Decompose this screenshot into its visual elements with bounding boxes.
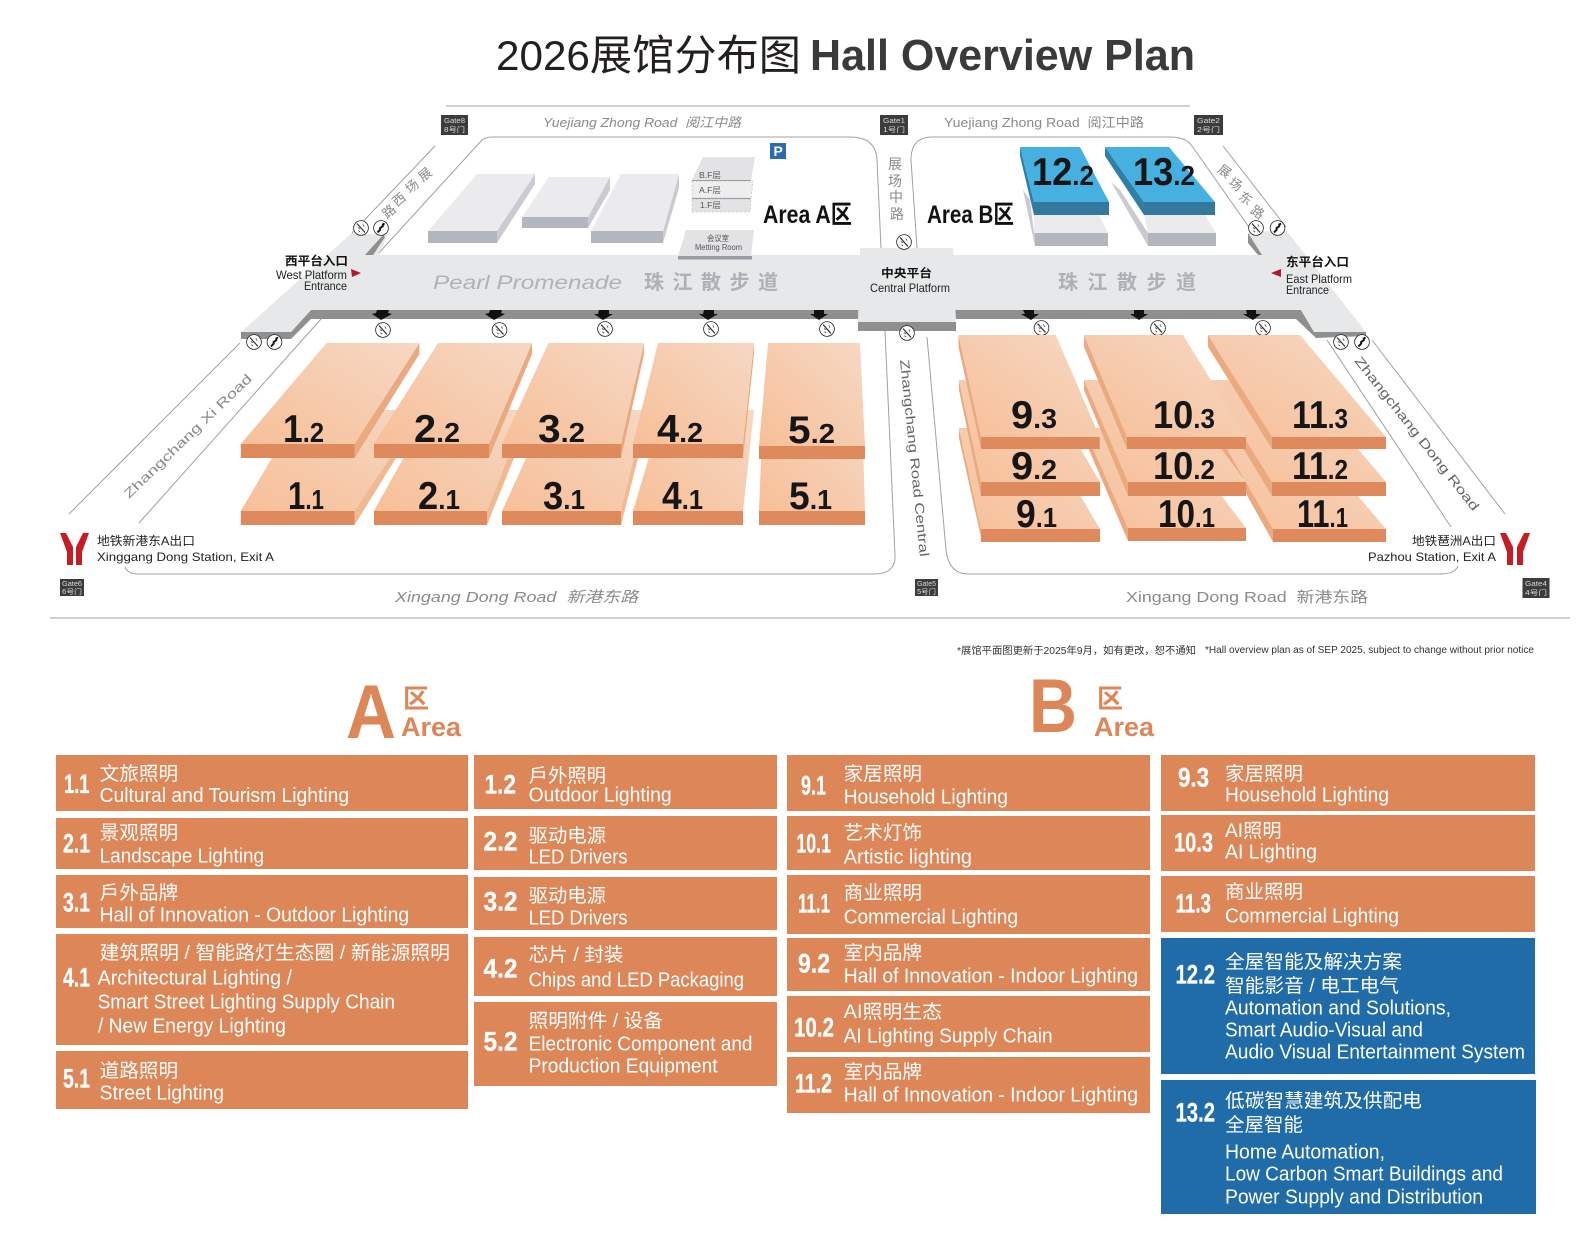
panel: 11.1: Commercial Lighting	[844, 906, 1018, 928]
panel: 10.1: Artistic lighting	[844, 846, 972, 868]
road label: east exhibition road: 场	[1226, 174, 1245, 194]
panel: 11.3: 商业照明	[1225, 881, 1303, 903]
panel: 5.2: 5.2	[484, 1026, 518, 1056]
east platform entrance label: Entrance	[1286, 283, 1329, 297]
panel: 2.2: LED Drivers	[529, 846, 628, 868]
panel: 11.2: 11.2	[795, 1068, 832, 1098]
panel: 11.1	[787, 875, 1150, 934]
road label: Zhangchang Road Central: Zhangchang Road Central	[897, 359, 932, 557]
panel: 1.1: 1.1	[64, 769, 90, 799]
floor stack B.F A.F 1.F: 1.F层	[700, 201, 721, 210]
hall 11.2 label: 11.2	[1292, 445, 1348, 488]
road outlines	[50, 106, 1570, 618]
panel: 9.1	[787, 755, 1150, 811]
central platform label: 中央平台	[881, 266, 932, 280]
hall 11.1 label: 11.1	[1297, 493, 1348, 536]
gates: 2号门	[1197, 125, 1220, 134]
gates: Gate5	[917, 581, 936, 588]
hall 9.3: 9.3	[1011, 394, 1057, 437]
panel: 13.2: Home Automation,	[1225, 1142, 1385, 1164]
promenade label east: 珠江散步道	[1058, 271, 1196, 294]
panel: 11.1: 11.1	[798, 888, 830, 918]
heading: Area B: 区	[1097, 684, 1123, 714]
hall 4.2	[633, 343, 754, 458]
label: Area A: Area A区	[763, 201, 852, 229]
panel: 10.3	[1161, 815, 1535, 871]
panel: 2.2: 驱动电源	[529, 825, 606, 847]
panel: 12.2: 智能影音 / 电工电气	[1225, 975, 1399, 997]
panel: 9.3: Household Lighting	[1225, 784, 1389, 806]
panel: 1.1: Cultural and Tourism Lighting	[100, 785, 349, 807]
hall 2.1 label: 2.1	[418, 475, 460, 518]
Area A grey buildings	[428, 174, 679, 243]
road label: west exhibition road	[379, 165, 435, 221]
panel: 11.3: Commercial Lighting	[1225, 906, 1399, 928]
metro: Pazhou Station	[1368, 533, 1530, 565]
road label: Xingang Dong Road west: Xingang Dong Road 新港东路	[394, 589, 640, 606]
Area B middle halls	[959, 380, 1386, 496]
panel: 5.2	[474, 1002, 777, 1086]
panel: 9.1: 家居照明	[844, 763, 922, 785]
hall 10.3: 10.3	[1153, 394, 1215, 437]
panel: 4.2	[474, 937, 777, 996]
panel: 9.1: Household Lighting	[844, 786, 1008, 808]
road label: Yuejiang Zhong Road east: Yuejiang Zhong Road 阅江中路	[944, 115, 1144, 130]
panel: 3.2	[474, 877, 777, 930]
hall 9.1 label: 9.1	[1016, 493, 1057, 536]
hall 1.1 label: 1.1	[288, 475, 324, 518]
road label: west exhibition road: 西	[389, 190, 409, 209]
panel: 12.2: 12.2	[1176, 960, 1215, 990]
panel: 11.2: 室内品牌	[844, 1061, 922, 1083]
panel: 9.2	[787, 938, 1150, 991]
meeting room	[678, 230, 754, 260]
metro: Xinggang Dong Station: Xinggang Dong Station, Exit A	[97, 550, 274, 564]
panel: 3.1: Hall of Innovation - Outdoor Lighting	[100, 904, 409, 926]
hall 10.1 label: 10.1	[1158, 493, 1215, 536]
footnote	[957, 644, 1534, 657]
panel: 11.3	[1161, 876, 1535, 932]
road label: central exhibition road: 路	[890, 206, 904, 222]
east platform entrance label	[1271, 254, 1352, 297]
panel: 10.2: 10.2	[794, 1012, 834, 1042]
icons: no-scooter and stair markers	[247, 221, 1369, 349]
panel: 5.1	[56, 1051, 468, 1109]
road label: Xingang Dong Road east: Xingang Dong Road 新港东路	[1126, 589, 1368, 606]
heading: Area A: 区	[403, 684, 429, 714]
panel: 12.2: Automation and Solutions,	[1225, 998, 1451, 1020]
hall 5.2	[759, 343, 865, 459]
panel: 1.2: 1.2	[484, 770, 516, 800]
panel: 10.2: AI照明生态	[844, 1001, 942, 1023]
panel: 1.2: 戶外照明	[529, 765, 606, 787]
west platform entrance label: 西平台入口	[285, 253, 348, 268]
panel: 11.3: 11.3	[1176, 888, 1211, 918]
hall 2.2: 2.2	[414, 408, 460, 451]
panel: 4.1	[56, 934, 468, 1045]
hall 3.1 label: 3.1	[543, 475, 585, 518]
road label: west exhibition road: 场	[402, 177, 422, 196]
road label: east exhibition road: 展	[1215, 161, 1234, 181]
icon: parking: P	[774, 143, 783, 159]
gates: Gate1	[883, 118, 905, 125]
title: Hall Overview Plan	[810, 31, 1195, 80]
title	[496, 31, 1195, 80]
panel: 10.3: 10.3	[1174, 828, 1213, 858]
promenade label west: Pearl Promenade	[433, 273, 622, 294]
hall 2.2	[374, 343, 532, 458]
panel: 5.1: 5.1	[63, 1064, 90, 1094]
panel: 13.2: 13.2	[1176, 1098, 1215, 1128]
panel: 3.1	[56, 875, 468, 928]
icon: parking	[770, 143, 786, 159]
panel: 5.1: Street Lighting	[100, 1082, 224, 1104]
hall 11.3: 11.3	[1292, 394, 1348, 437]
panel: 5.2: Production Equipment	[529, 1056, 718, 1078]
footnote: *展馆平面图更新于2025年9月，如有更改，恕不通知	[957, 644, 1196, 657]
panel: 11.2: Hall of Innovation - Indoor Lighting	[844, 1084, 1138, 1106]
panel: 9.2: 9.2	[798, 948, 830, 978]
gates: Gate2	[1197, 118, 1220, 125]
road label: central exhibition road: 场	[888, 173, 902, 189]
metro: Pazhou Station: 地铁琶洲A出口	[1412, 534, 1496, 548]
hall 3.2	[502, 343, 644, 458]
hall 13.2	[1105, 147, 1215, 215]
central platform label: Central Platform	[870, 281, 950, 295]
heading: Area A: A	[346, 670, 396, 755]
panel: 9.3	[1161, 755, 1535, 811]
central platform label	[870, 266, 950, 295]
map: hall overview plan	[50, 106, 1570, 618]
floor stack B.F A.F 1.F: A.F层	[699, 186, 721, 195]
promenade: Pearl Promenade walkway	[241, 230, 1366, 339]
hall 13.2: 13.2	[1133, 151, 1195, 194]
panel: 10.3: AI Lighting	[1225, 842, 1317, 864]
hall 4.1 label: 4.1	[662, 475, 703, 518]
hall 10.2 label: 10.2	[1153, 445, 1215, 488]
panel: 1.1	[56, 755, 468, 811]
gates	[60, 115, 1550, 598]
road label: Yuejiang Zhong Road west: Yuejiang Zhong Road 阅江中路	[543, 115, 742, 130]
panel: 12.2: Smart Audio-Visual and	[1225, 1020, 1423, 1042]
panel: 10.2	[787, 996, 1150, 1052]
road label: west exhibition road: 展	[415, 165, 435, 184]
hall 4.2: 4.2	[657, 408, 703, 451]
panel: 1.1: 文旅照明	[100, 763, 178, 785]
panel: 11.1: 商业照明	[844, 882, 922, 904]
gates: Gate4	[1525, 581, 1547, 588]
hall 5.2: 5.2	[788, 409, 835, 452]
panel: 3.2: 3.2	[484, 886, 518, 916]
central platform	[858, 248, 956, 331]
label: Area B: Area B区	[927, 201, 1014, 229]
panel: 5.2: Electronic Component and	[529, 1034, 752, 1056]
panel: 10.1	[787, 816, 1150, 870]
panel: 3.2: LED Drivers	[529, 908, 628, 930]
road label: west exhibition road: 路	[379, 202, 399, 221]
west platform entrance label: West Platform	[276, 268, 347, 282]
panel: 13.2	[1161, 1080, 1536, 1214]
heading: Area A: Area	[401, 712, 462, 742]
Area A lower halls base	[241, 410, 865, 525]
floor stack B.F A.F 1.F: B.F层	[699, 171, 721, 180]
promenade label west	[433, 271, 778, 294]
panel: 5.2: 照明附件 / 设备	[529, 1010, 663, 1032]
road label: central exhibition road: 展	[888, 156, 902, 172]
panel: 2.1	[56, 818, 468, 869]
panel: 4.1: Smart Street Lighting Supply Chain	[98, 992, 395, 1014]
panel: 11.2	[787, 1057, 1150, 1113]
panel: 1.2	[474, 755, 777, 809]
road label: east exhibition road: 东	[1236, 188, 1255, 208]
panel: 2.1: 2.1	[63, 828, 90, 858]
panel: 5.1: 道路照明	[100, 1060, 178, 1082]
meeting room: Metting Room	[695, 243, 742, 252]
east platform entrance label: 东平台入口	[1286, 254, 1349, 269]
heading: Area B: B	[1029, 664, 1077, 749]
hall 10.3	[1084, 335, 1246, 449]
road label: Zhangchang Dong Road: Zhangchang Dong Road	[1352, 354, 1482, 514]
hall 12.2: 12.2	[1032, 151, 1094, 194]
hall 1.2: 1.2	[283, 408, 324, 451]
heading: Area B: Area	[1094, 712, 1155, 742]
panel: 2.2	[474, 816, 777, 870]
panel: 4.1: / New Energy Lighting	[98, 1016, 286, 1038]
panel: 9.2: Hall of Innovation - Indoor Lighting	[844, 966, 1138, 988]
panel: 10.3: AI照明	[1225, 821, 1282, 842]
gates: Gate8	[444, 118, 465, 125]
panel: 4.1: 4.1	[63, 962, 90, 992]
panel: 3.2: 驱动电源	[529, 885, 606, 907]
gates: 4号门	[1525, 588, 1547, 597]
hall 1.2	[241, 343, 419, 458]
promenade label west: 珠江散步道	[644, 271, 778, 294]
road label: central exhibition road	[888, 156, 904, 222]
gates: Gate6	[62, 581, 82, 588]
gates: 6号门	[62, 587, 82, 596]
panel: 10.1: 艺术灯饰	[844, 822, 922, 844]
meeting room: 会议室	[707, 233, 729, 243]
panel: 4.1: Architectural Lighting /	[98, 968, 292, 990]
panel: 10.2: AI Lighting Supply Chain	[844, 1026, 1053, 1048]
panel: 2.1: Landscape Lighting	[100, 846, 264, 868]
panel: 3.1: 戶外品牌	[100, 882, 178, 904]
hall 12.2	[1020, 147, 1109, 215]
floor stack B.F A.F 1.F	[692, 157, 755, 212]
panel: 9.2: 室内品牌	[844, 942, 922, 964]
road label: Zhangchang Xi Road: Zhangchang Xi Road	[121, 371, 255, 501]
panel: 10.1: 10.1	[796, 828, 831, 858]
lower grey under blue halls	[1023, 182, 1216, 246]
title: 2026展馆分布图	[496, 32, 801, 79]
east platform entrance label: East Platform	[1286, 272, 1352, 286]
panel: 4.2: 芯片 / 封装	[529, 944, 624, 966]
Area B lowest halls	[959, 428, 1386, 542]
hall 11.3	[1208, 335, 1386, 449]
panel: 13.2: Power Supply and Distribution	[1225, 1186, 1483, 1208]
road label: east exhibition road	[1215, 161, 1267, 222]
panel: 12.2: 全屋智能及解决方案	[1225, 951, 1402, 973]
metro: Pazhou Station: Pazhou Station, Exit A	[1368, 550, 1496, 564]
arrows: entrances into halls	[372, 310, 1261, 320]
road label: central exhibition road: 中	[889, 189, 903, 205]
panel: 2.2: 2.2	[484, 826, 518, 856]
panel: 2.1: 景观照明	[100, 823, 178, 844]
heading: Area B	[1029, 664, 1155, 749]
hall 5.1 label: 5.1	[789, 475, 832, 518]
panel: 4.2: Chips and LED Packaging	[529, 970, 744, 992]
panel: 12.2	[1161, 938, 1535, 1074]
panel: 1.2: Outdoor Lighting	[529, 784, 672, 806]
hall 9.3	[958, 335, 1100, 449]
panel: 4.1: 建筑照明 / 智能路灯生态圈 / 新能源照明	[100, 942, 450, 964]
panel: 3.1: 3.1	[63, 888, 90, 918]
panel: 13.2: 全屋智能	[1225, 1114, 1303, 1136]
gates: 5号门	[917, 587, 936, 596]
panel: 13.2: Low Carbon Smart Buildings and	[1225, 1164, 1503, 1186]
hall 9.2 label: 9.2	[1011, 445, 1057, 488]
hall 3.2: 3.2	[538, 408, 585, 451]
metro: Xinggang Dong Station: 地铁新港东A出口	[97, 533, 195, 548]
panel: 9.3: 9.3	[1178, 762, 1209, 792]
metro: Xinggang Dong Station	[60, 533, 274, 565]
gates: 1号门	[883, 125, 905, 134]
footnote: *Hall overview plan as of SEP 2025, subject to change without prior notice	[1205, 645, 1534, 656]
west platform entrance label: Entrance	[304, 279, 347, 293]
gates: 8号门	[444, 125, 465, 134]
panel: 13.2: 低碳智慧建筑及供配电	[1225, 1090, 1422, 1112]
panel: 12.2: Audio Visual Entertainment System	[1225, 1042, 1525, 1064]
panel: 4.2: 4.2	[484, 954, 518, 984]
west platform entrance label	[276, 253, 361, 293]
panel: 9.3: 家居照明	[1225, 763, 1303, 785]
road label: east exhibition road: 路	[1248, 202, 1267, 222]
panel: 9.1: 9.1	[801, 770, 826, 800]
heading: Area A	[346, 670, 462, 755]
